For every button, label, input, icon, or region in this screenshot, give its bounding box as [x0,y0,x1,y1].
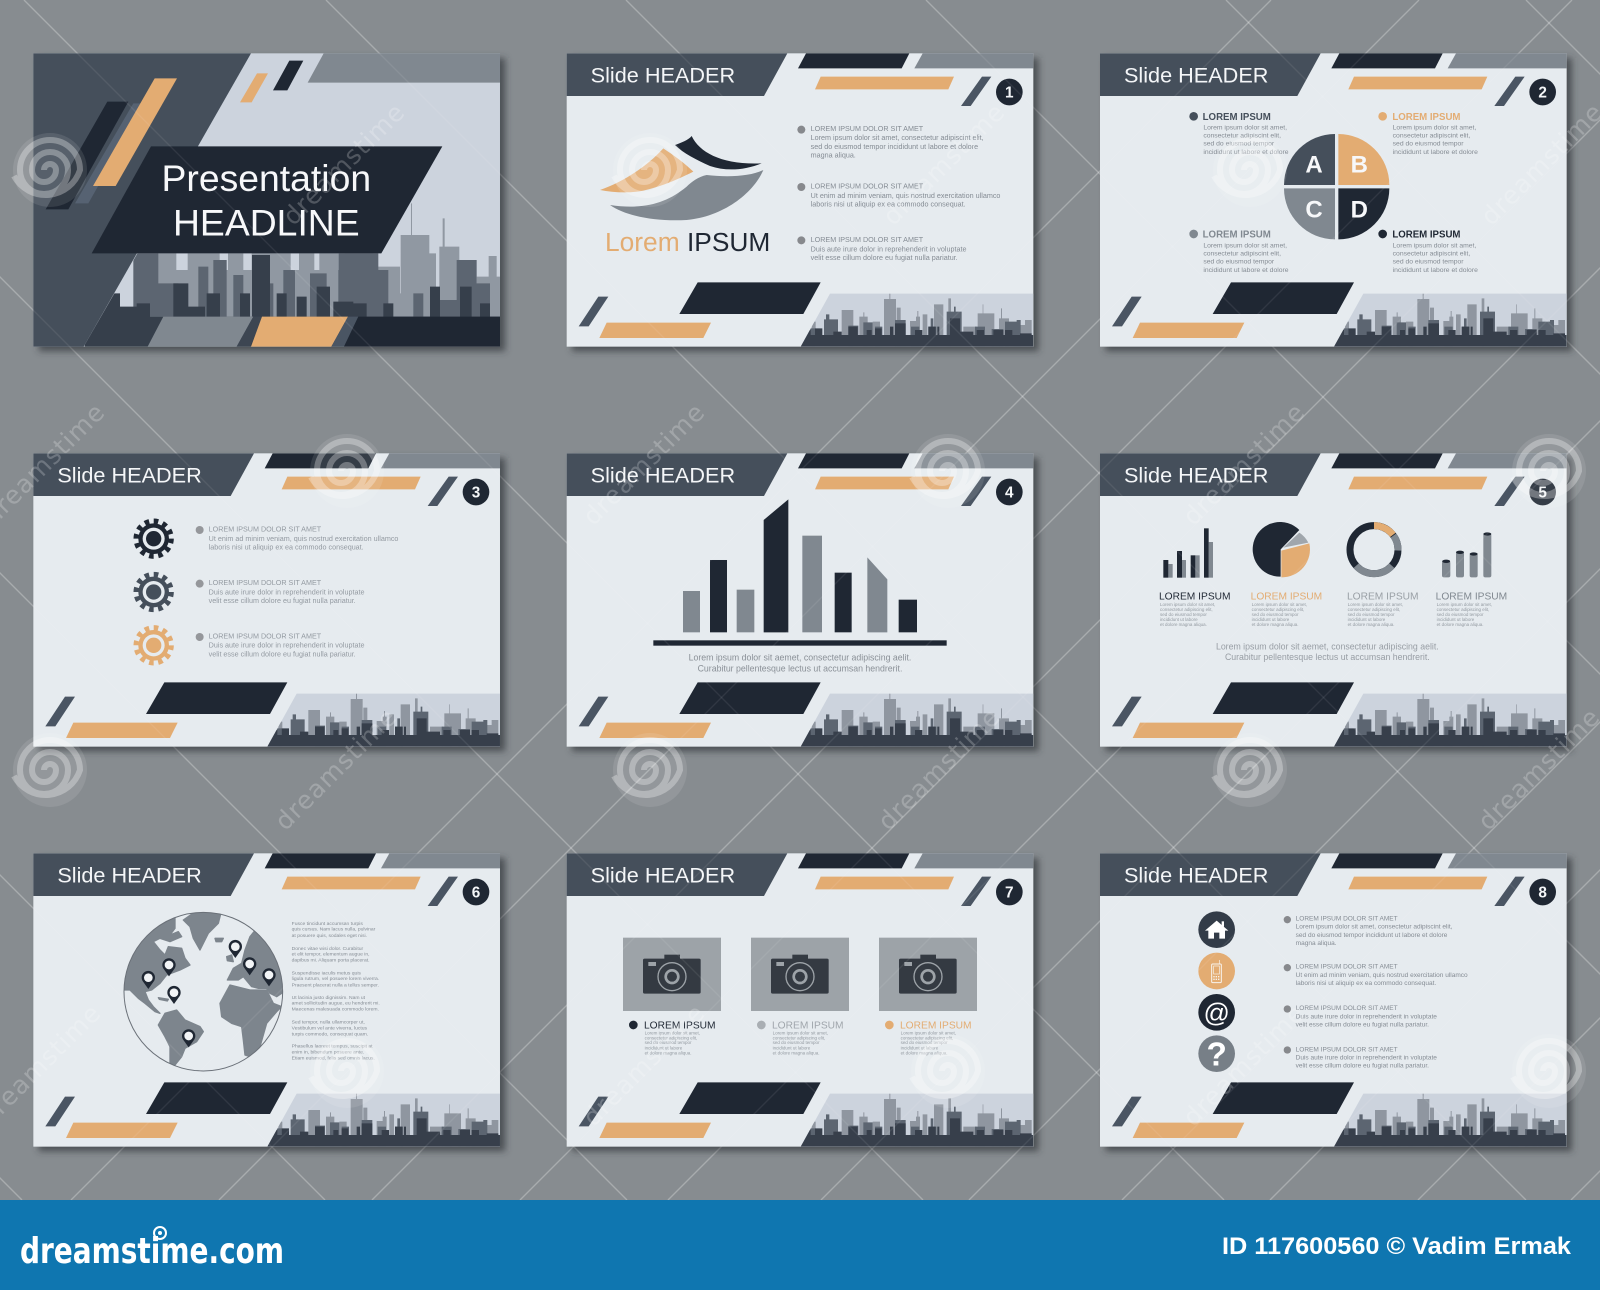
bullet list: LOREM IPSUM DOLOR SIT AMET [1296,916,1398,923]
label A [1189,112,1289,156]
number badge: 8 [1538,884,1547,901]
label C: Lorem ipsum dolor sit amet, [1203,242,1287,249]
gear text: LOREM IPSUM DOLOR SIT AMET [209,525,322,534]
icon: phone [1198,953,1235,989]
watermark text: dreamstime [577,397,711,531]
gear text: velit esse cillum dolore eu fugiat nulla pariatur. [209,649,356,658]
title slide [33,53,505,351]
chart labels [1159,591,1507,627]
photo card 2: LOREM IPSUM [772,1020,844,1031]
photo card 3: Lorem ipsum dolor sit amet, [901,1030,956,1035]
quadrant pie: B [1351,152,1368,179]
label B: LOREM IPSUM [1392,112,1460,123]
chart: pie [1253,522,1310,577]
text column: Fusce tincidunt accumsan turpis [292,921,363,927]
bullet list: LOREM IPSUM DOLOR SIT AMET [811,235,924,244]
gear text: LOREM IPSUM DOLOR SIT AMET [209,578,322,587]
chart labels: et dolore magna aliqua. [1437,622,1484,627]
chart labels: sed do eiusmod tempor [1252,612,1299,617]
bullet list: Duis aute irure dolor in reprehenderit in voluptate [811,244,966,253]
label D: sed do eiusmod tempor [1393,259,1464,266]
chart labels: et dolore magna aliqua. [1160,622,1207,627]
image credit: ID 117600560 © Vadim Ermak [1222,1233,1572,1260]
number badge [1529,79,1556,105]
caption [1216,641,1439,662]
gear text [196,525,398,658]
icon: slate gear [136,575,171,609]
photo card 2 [751,938,849,1056]
bullet list: Duis aute irure dolor in reprehenderit in voluptate [1296,1054,1437,1061]
icon: question mark: ? [1206,1037,1227,1074]
chart labels: LOREM IPSUM [1159,591,1231,602]
slide 4: bar chart [567,453,1039,751]
slide 3: gears [33,453,505,751]
photo card 1: sed do eiusmod tempor [645,1040,692,1045]
caption: Lorem ipsum dolor sit aemet, consectetur adipiscing aelit. [689,653,911,663]
slide 5: four charts [1100,453,1572,751]
gear text: Ut enim ad minim veniam, quis nostrud exercitation ullamco [209,534,398,543]
slide 6: globe [33,853,505,1151]
label D: incididunt ut labore et dolore [1393,267,1478,274]
icon: question mark [1198,1035,1235,1074]
chart labels: consectetur adipiscing elit, [1252,607,1304,612]
label C [1189,230,1289,274]
chart labels: incididunt ut labore [1437,617,1475,622]
number badge [463,879,489,905]
text column: Ut lacinia justo dignissim. Nam ut [292,995,366,1001]
gear text: velit esse cillum dolore eu fugiat nulla pariatur. [209,596,356,605]
quadrant pie: C [1305,197,1323,224]
headline: Presentation [162,157,371,199]
bullet list: Lorem ipsum dolor sit amet, consectetur adipiscint elit, [811,133,984,142]
chart labels: Lorem ipsum dolor sit amet, [1348,602,1403,607]
slide 2: ABCD pie [1100,53,1572,351]
number badge [996,79,1023,105]
icon: dark gear [136,521,171,556]
headline: HEADLINE [173,202,360,244]
text column: amet sollicitudin augue, eu hendrerit mi. [292,1001,380,1007]
footer banner [0,1200,1600,1290]
label D [1378,230,1478,274]
slide 3: gears: Slide HEADER [57,463,202,488]
text column: Donec vitae wisi dolor. Curabitur [292,946,363,952]
label D: LOREM IPSUM [1392,230,1460,241]
number badge [1529,879,1556,905]
bullet list: velit esse cillum dolore eu fugiat nulla pariatur. [1296,1062,1429,1069]
chart labels: Lorem ipsum dolor sit amet, [1160,602,1215,607]
watermark text: dreamstime [1177,998,1311,1132]
bullet list: Duis aute irure dolor in reprehenderit in voluptate [1296,1013,1437,1020]
label A: incididunt ut labore et dolore [1203,149,1289,156]
watermark text: dreamstime [577,998,711,1132]
number badge [463,479,489,505]
gear text: Duis aute irure dolor in reprehenderit in voluptate [209,641,364,650]
chart labels: sed do eiusmod tempor [1348,612,1395,617]
bullet list: LOREM IPSUM DOLOR SIT AMET [1296,1005,1398,1012]
icon: house [1198,911,1235,948]
icon: at sign [1198,994,1235,1031]
number badge [996,879,1023,905]
number badge: 4 [1005,484,1014,501]
watermark text: dreamstime [872,702,1006,836]
text column: Vestibulum vel ante viverra, luctus [292,1025,368,1031]
chart labels: consectetur adipiscing elit, [1437,607,1489,612]
slide 4: bar chart: Slide HEADER [591,463,735,488]
photo card 3: sed do eiusmod tempor [901,1040,948,1045]
gear text: Duis aute irure dolor in reprehenderit in voluptate [209,587,364,596]
bullet list: Lorem ipsum dolor sit amet, consectetur adipiscint elit, [1296,924,1453,931]
chart labels: incididunt ut labore [1252,617,1290,622]
photo card 2: consectetur adipiscing elit, [773,1035,825,1040]
photo card 3: et dolore magna aliqua. [901,1051,948,1056]
slide 1: logo and bullets: Slide HEADER [591,63,735,88]
photo card 1: incididunt ut labore [645,1045,683,1050]
label D: Lorem ipsum dolor sit amet, [1393,242,1476,249]
label B: sed do eiusmod tempor [1393,141,1464,148]
quadrant pie: A [1305,152,1323,179]
photo card 2: Lorem ipsum dolor sit amet, [773,1030,828,1035]
brand: dreamstime.com [20,1231,284,1272]
logo [600,136,770,257]
bullet list: sed do eiusmod tempor incididunt ut labore et dolore [1296,932,1448,939]
chart labels: Lorem ipsum dolor sit amet, [1252,602,1307,607]
text column: enim in, bibendum posuere ante. [292,1049,364,1055]
bullet list: laboris nisi ut aliquip ex ea commodo consequat. [811,200,966,209]
text column: Sed tempor, nulla ullamcorper ut, [292,1019,365,1025]
chart labels: Lorem ipsum dolor sit amet, [1437,602,1492,607]
number badge: 2 [1538,84,1547,101]
chart labels: consectetur adipiscing elit, [1348,607,1400,612]
photo card 3: consectetur adipiscing elit, [901,1035,953,1040]
text column: Maecenas malesuada commodo lorem. [292,1007,379,1013]
label C: consectetur adipiscint elit, [1203,251,1281,258]
photo card 2: et dolore magna aliqua. [773,1051,820,1056]
text column: quis cursus. Nam lacus nulla, pulvinar [292,927,376,933]
slide 8: contact icons: Slide HEADER [1124,863,1268,888]
watermark text: dreamstime [277,97,411,231]
label C: incididunt ut labore et dolore [1203,267,1289,274]
watermark text: dreamstime [1177,397,1311,531]
number badge: 1 [1005,84,1014,101]
bullet list: Ut enim ad minim veniam, quis nostrud exercitation ullamco [811,191,1000,200]
gear text: laboris nisi ut aliquip ex ea commodo consequat. [209,543,364,552]
photo card 2: sed do eiusmod tempor [773,1040,820,1045]
bullet list: LOREM IPSUM DOLOR SIT AMET [1296,1046,1398,1053]
chart labels: LOREM IPSUM [1436,591,1507,602]
slide 6: globe: Slide HEADER [57,863,202,888]
photo card 1: et dolore magna aliqua. [645,1051,692,1056]
slide 8: contact icons [1100,853,1572,1151]
bullet list: velit esse cillum dolore eu fugiat nulla pariatur. [811,253,958,262]
caption: Lorem ipsum dolor sit aemet, consectetur adipiscing aelit. [1216,641,1439,651]
number badge: 6 [472,884,480,901]
label A: consectetur adipiscint elit, [1203,133,1281,140]
chart: cylinders [1442,532,1491,577]
label B [1378,112,1478,156]
number badge: 5 [1538,484,1547,501]
chart labels: incididunt ut labore [1160,617,1198,622]
gear text: LOREM IPSUM DOLOR SIT AMET [209,631,322,640]
text column: turpis commodo, consequat quam. [292,1031,368,1037]
bullet list: magna aliqua. [1296,940,1337,947]
photo card 3: LOREM IPSUM [900,1020,972,1031]
text column [292,921,380,1062]
slide 5: four charts: Slide HEADER [1124,463,1268,488]
photo card 3 [879,938,977,1056]
text column: et elit tempor, elementum augue in, [292,952,370,958]
number badge: 7 [1005,884,1014,901]
quadrant pie: D [1351,197,1368,224]
photo card 1: LOREM IPSUM [644,1020,716,1031]
number badge: 3 [472,484,480,501]
chart labels: sed do eiusmod tempor [1160,612,1207,617]
text column: ligula rutrum, vel posuere lorem viverra. [292,976,379,982]
photo card 1: Lorem ipsum dolor sit amet, [645,1030,700,1035]
globe with pins [120,908,287,1071]
quadrant pie [1284,134,1389,239]
bullet list: LOREM IPSUM DOLOR SIT AMET [1296,964,1398,971]
bullet list: velit esse cillum dolore eu fugiat nulla pariatur. [1296,1021,1429,1028]
logo: Lorem IPSUM [605,227,770,257]
chart: donut [1350,526,1398,574]
bullet list [1284,916,1468,1069]
watermark text: dreamstime [269,702,403,836]
slide 1: logo and bullets [567,53,1039,351]
caption: Curabitur pellentesque lectus ut accumsan hendrerit. [698,663,902,673]
chart labels: LOREM IPSUM [1251,591,1322,602]
icon: at sign: @ [1203,998,1230,1028]
text column: Praesent placerat nulla a tellus semper. [292,982,379,988]
label A: sed do eiusmod tempor [1203,141,1275,148]
label B: Lorem ipsum dolor sit amet, [1393,124,1476,131]
photo card 3: incididunt ut labore [901,1045,939,1050]
text column: Phasellus laoreet tempus, suscipit at [292,1044,373,1050]
label C: sed do eiusmod tempor [1203,259,1275,266]
number badge [1529,479,1556,505]
text column: at posuere quis, sodales eget nisi. [292,933,367,939]
caption [689,653,911,673]
chart labels: consectetur adipiscing elit, [1160,607,1213,612]
watermark text: dreamstime [877,97,1011,231]
bullet list: magna aliqua. [811,151,856,160]
bar chart [653,499,947,646]
bullet list: sed do eiusmod tempor incididunt ut labore et dolore [811,142,978,151]
photo card 1: consectetur adipiscing elit, [645,1035,697,1040]
number badge [996,479,1023,505]
text column: Suspendisse iaculis metus quis [292,970,361,976]
slide 7: photo placeholders [567,853,1039,1151]
label A: Lorem ipsum dolor sit amet, [1203,124,1287,131]
slide 7: photo placeholders: Slide HEADER [591,863,735,888]
bullet list: LOREM IPSUM DOLOR SIT AMET [811,182,924,191]
bullet list: LOREM IPSUM DOLOR SIT AMET [811,124,924,133]
chart: paired bars [1163,528,1213,578]
bullet list: Ut enim ad minim veniam, quis nostrud exercitation ullamco [1296,972,1468,979]
label D: consectetur adipiscint elit, [1393,251,1470,258]
text column: Etiam euismod, felis sed omnis lacus. [292,1056,375,1062]
bullet list: laboris nisi ut aliquip ex ea commodo consequat. [1296,980,1436,987]
photo card 2: incididunt ut labore [773,1045,811,1050]
label A: LOREM IPSUM [1203,112,1271,123]
chart labels: LOREM IPSUM [1347,591,1419,602]
label B: consectetur adipiscint elit, [1393,133,1470,140]
slide 2: ABCD pie: Slide HEADER [1124,63,1268,88]
label C: LOREM IPSUM [1203,230,1271,241]
bullet list [797,124,1000,262]
watermark spirals [13,133,1586,1108]
chart labels: sed do eiusmod tempor [1437,612,1484,617]
chart labels: et dolore magna aliqua. [1348,622,1395,627]
text column: dapibus mi. Aliquam porta placerat. [292,958,370,964]
icon: tan gear [136,628,171,663]
caption: Curabitur pellentesque lectus ut accumsan hendrerit. [1225,652,1430,662]
chart labels: incididunt ut labore [1348,617,1386,622]
chart labels: et dolore magna aliqua. [1252,622,1299,627]
photo card 1 [623,938,721,1056]
label B: incididunt ut labore et dolore [1393,149,1478,156]
